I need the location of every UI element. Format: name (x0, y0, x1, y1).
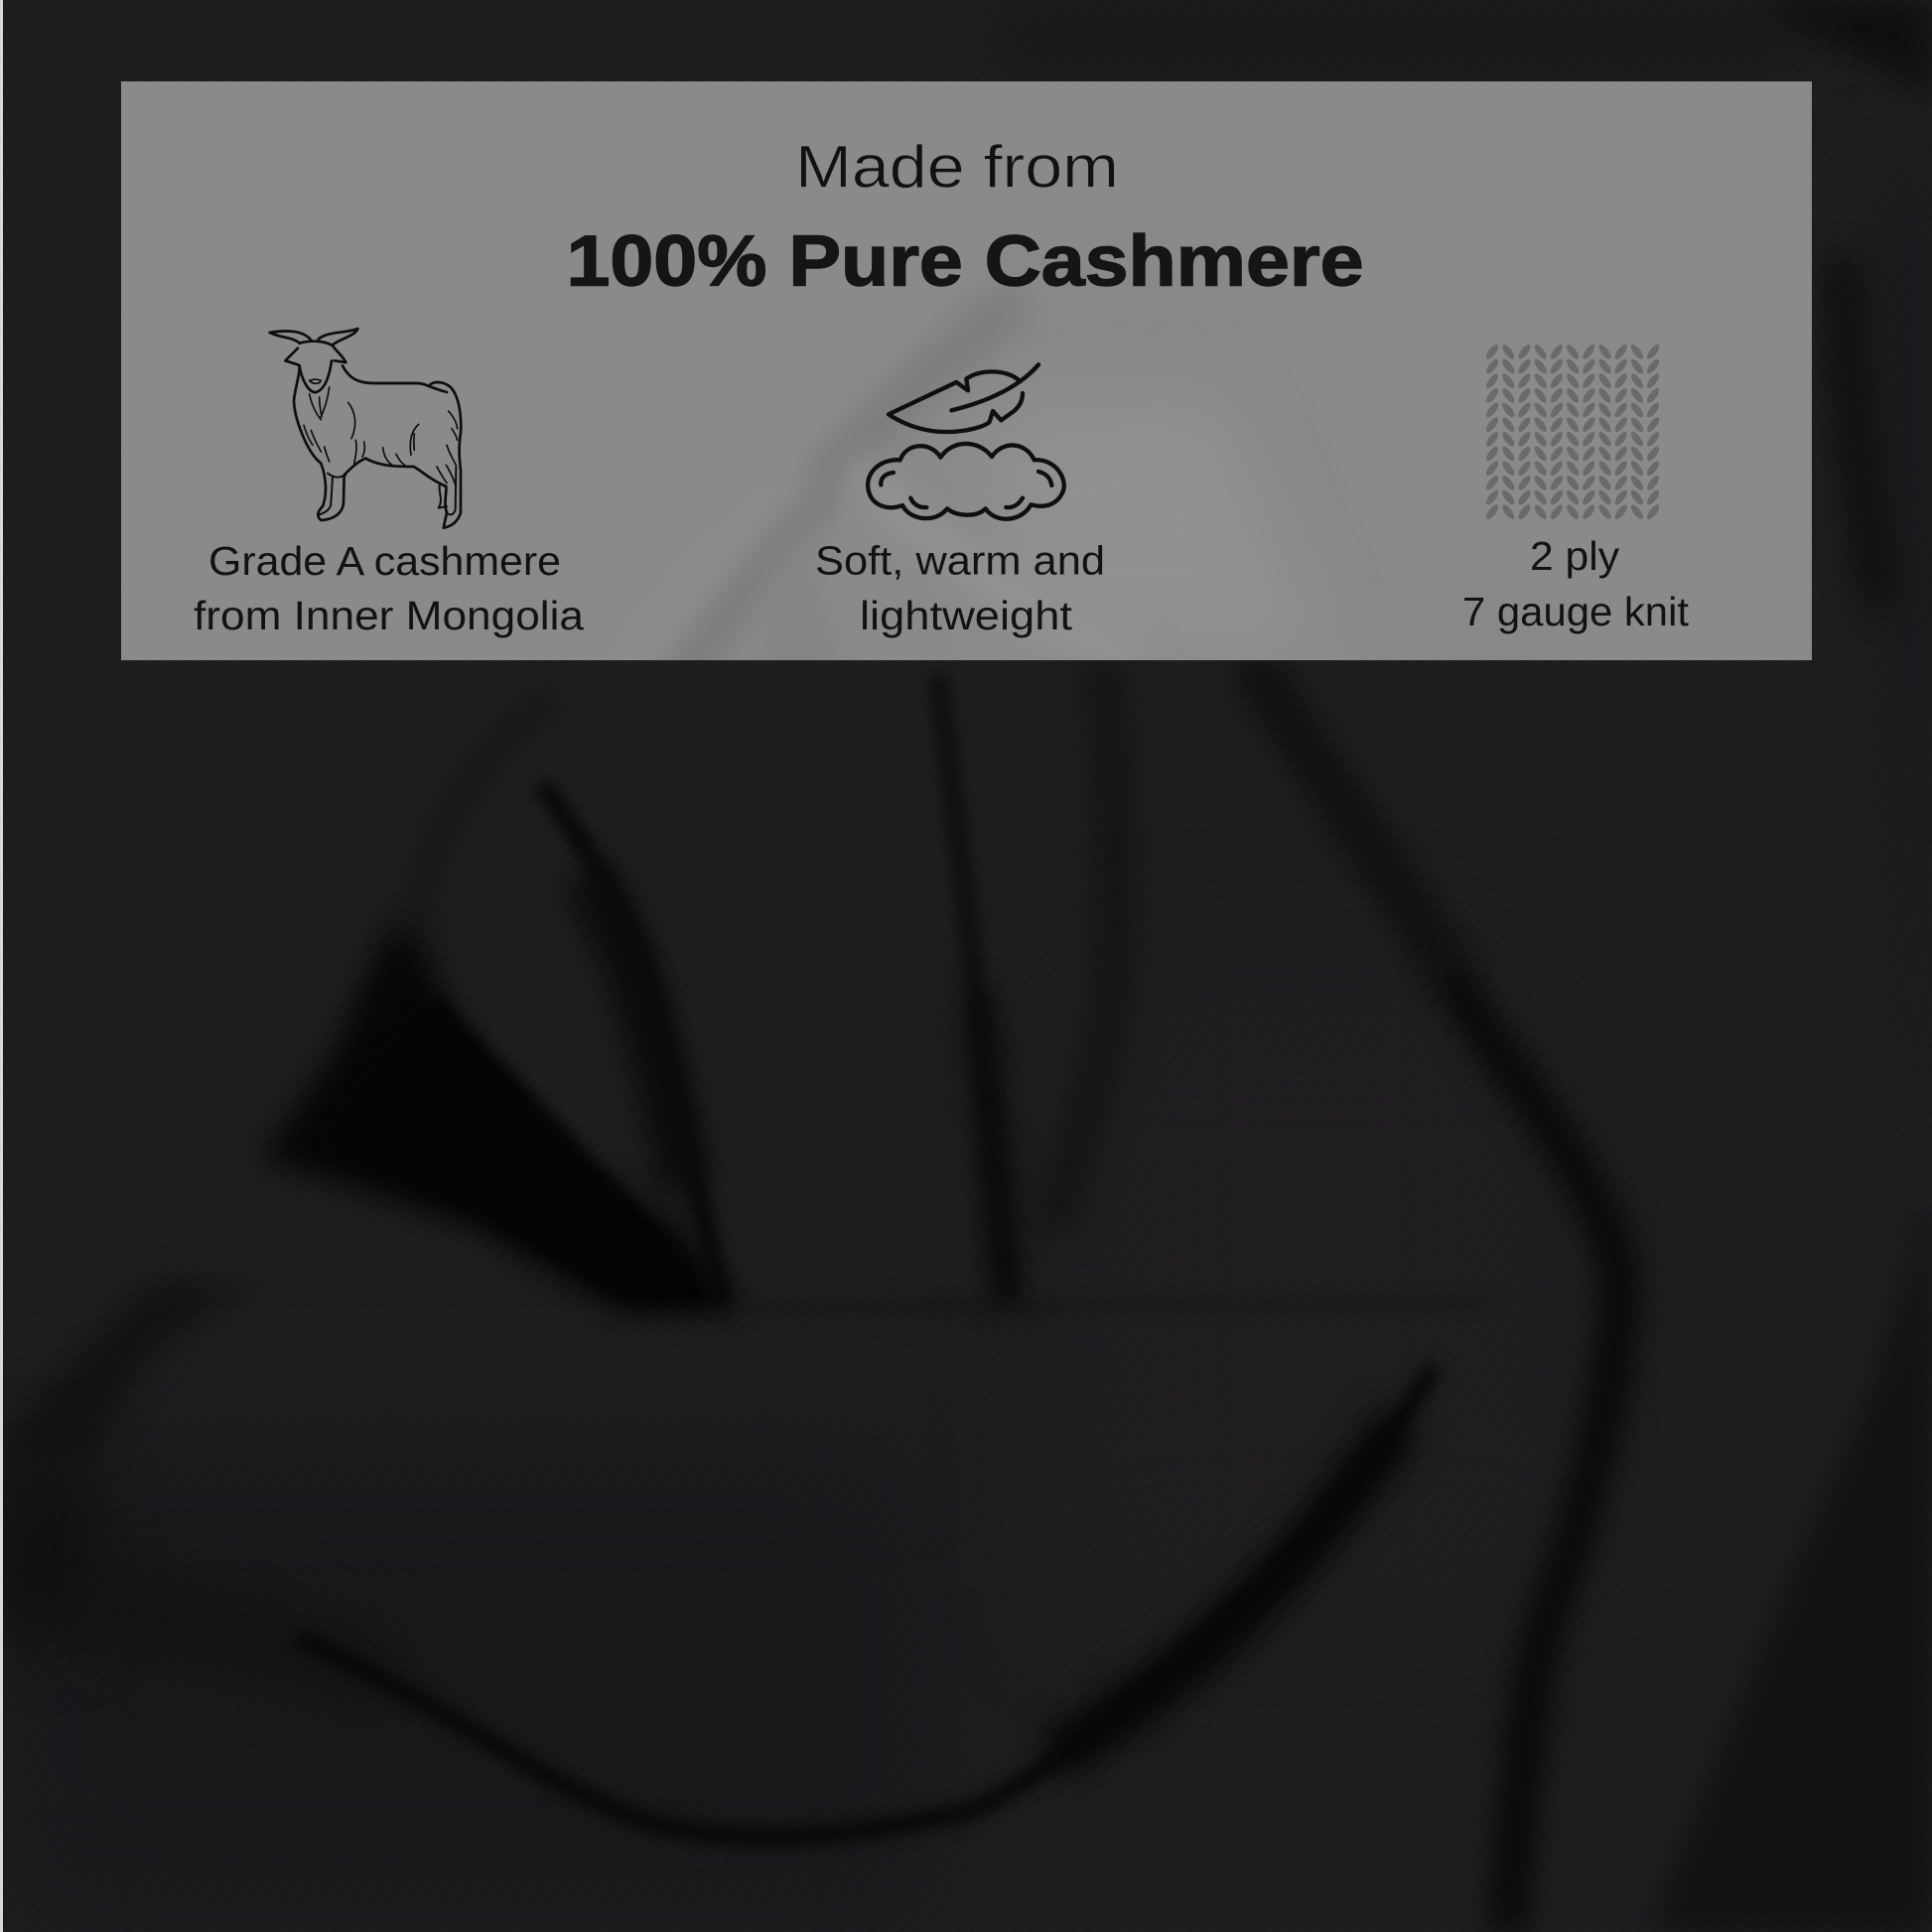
label: Soft, warm and lightweight: Soft, warm and (815, 538, 1105, 584)
label: 2 ply 7 gauge knit (1462, 533, 1690, 634)
label: Soft, warm and lightweight (815, 538, 1105, 638)
feather (889, 364, 1038, 432)
label: 2 ply 7 gauge knit: 2 ply (1530, 533, 1620, 579)
label: Grade A cashmere from Inner Mongolia: Grade A cashmere (208, 538, 561, 584)
label: Grade A cashmere from Inner Mongolia (194, 538, 584, 638)
heading: 100% Pure Cashmere: 100% Pure Cashmere (566, 222, 1364, 302)
left edge white strip (0, 0, 3, 1932)
label: Grade A cashmere from Inner Mongolia: from Inner Mongolia (194, 593, 584, 638)
panel background (121, 81, 1812, 685)
icon: feather above cloud (868, 364, 1064, 519)
icon: knit stitch pattern (1484, 345, 1661, 519)
label: Soft, warm and lightweight: lightweight (860, 593, 1073, 638)
panel: cashmere information (121, 81, 1812, 685)
label: 2 ply 7 gauge knit: 7 gauge knit (1462, 589, 1690, 634)
icon: goat (270, 329, 461, 528)
cloud (868, 444, 1064, 519)
heading: Made from: Made from (795, 133, 1119, 201)
